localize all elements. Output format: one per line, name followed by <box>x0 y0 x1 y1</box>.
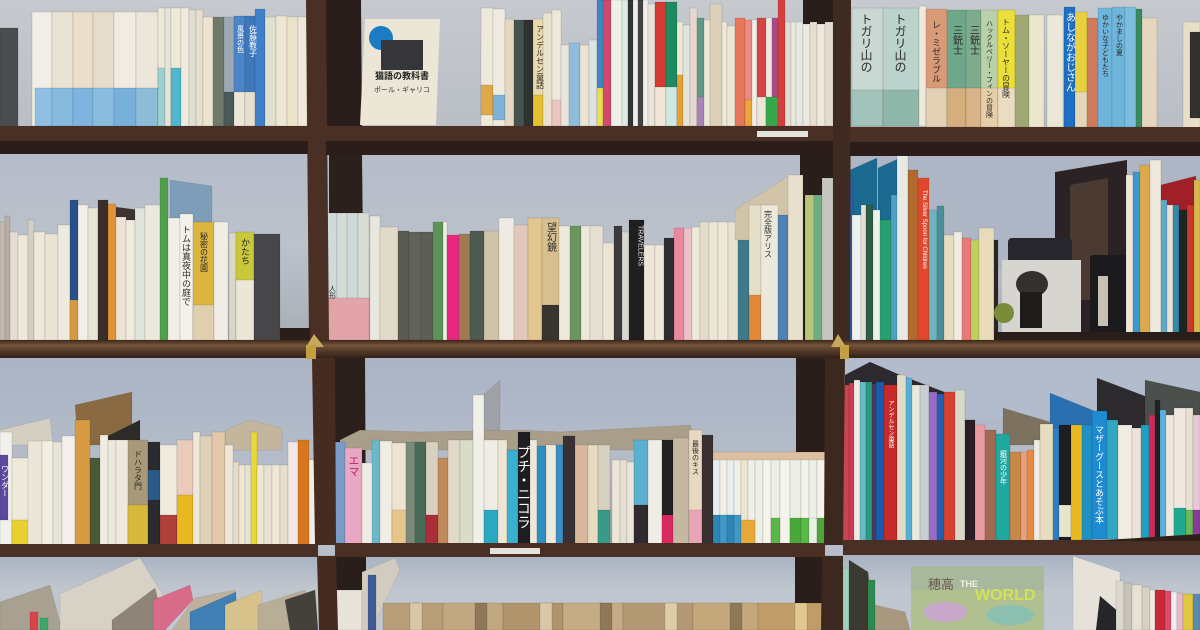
rear uprights behind the books <box>326 0 834 630</box>
spine titles: top row: 三銃士 <box>968 25 980 55</box>
black bookend with books and card <box>994 160 1127 338</box>
spine titles: third row: 銀河の少年 <box>1000 449 1007 486</box>
shelf label plate top <box>757 131 808 137</box>
spine titles: top row: ハックルベリー・フィンの冒険 <box>986 20 993 119</box>
book: cat textbook cover: ポール・ギャリコ <box>374 86 430 94</box>
card with ink figure <box>1002 260 1081 337</box>
spine titles: second row: かたち <box>240 238 250 265</box>
illustrated book: the world: THE <box>960 579 978 589</box>
right upright post <box>821 0 851 630</box>
book: cat textbook cover <box>360 19 440 125</box>
illustrated book: the world <box>911 566 1044 630</box>
spine titles: second row <box>181 190 927 306</box>
spine titles: top row <box>236 12 1123 119</box>
spine titles: second row: 完全版アリス <box>764 210 772 258</box>
left upright post <box>306 0 338 630</box>
spine titles: third row: ドハラタ門 <box>134 450 142 491</box>
spine titles: second row: 望幻鏡 <box>544 222 556 253</box>
books: top row, middle bay <box>481 0 833 126</box>
illustrated book: the world: WORLD <box>975 587 1035 604</box>
shelf board 2 with brass rail <box>0 328 1200 358</box>
spine titles: top row: トム・ソーヤーの冒険 <box>1002 18 1010 99</box>
books: second row, right bay <box>850 155 998 340</box>
spine titles: top row: 佐藤教子 <box>248 24 258 58</box>
spine titles: second row: The Silver Spoon for Children <box>921 190 927 269</box>
spine titles: third row: 最後のキス <box>692 440 699 475</box>
icon: blue round sticker <box>369 26 393 50</box>
shelf board 3 <box>0 534 1200 557</box>
brass clasp left <box>306 334 324 359</box>
spine titles: third row: マザーグースとあそぶ本 <box>1094 425 1104 525</box>
spine titles: third row: エマ <box>347 455 359 477</box>
spine titles: second row: 秘密の花園 <box>200 231 208 273</box>
books: bottom row, right bay <box>843 556 1200 630</box>
spine titles: top row: あしながおじさん <box>1064 12 1076 92</box>
books: top row, left bay <box>0 8 307 126</box>
spine titles: third row <box>0 400 1104 529</box>
shelf board 1 <box>0 126 1200 156</box>
books: bottom row, middle bay <box>336 558 822 630</box>
illustrated book: the world: 穂高 <box>928 577 954 592</box>
boxed green and blue book set <box>713 452 826 545</box>
books: bottom row, left bay <box>0 558 318 630</box>
books: third row, right bay <box>843 362 1200 545</box>
spine titles: third row: プチ・ニコラ <box>516 445 532 529</box>
book: cat textbook cover: 猫語の教科書 <box>375 70 429 81</box>
spine titles: third row: ワンダー <box>0 465 10 497</box>
spine titles: top row: 三銃士 <box>950 25 962 55</box>
books: second row, far right <box>1126 160 1200 340</box>
books: second row, left bay <box>0 178 280 340</box>
shelf label plate bottom <box>490 548 540 554</box>
spine titles: third row: アンデルセン童話 <box>887 400 894 449</box>
books: second row, middle bay <box>327 175 833 340</box>
spine titles: top row: ゆかいな子どもたち <box>1102 14 1109 77</box>
spine titles: top row: 風景の色 <box>236 25 244 53</box>
spine titles: top row: トガリ山の <box>859 13 873 73</box>
books: third row, middle bay <box>334 380 713 545</box>
spine titles: top row: レ・ミゼラブル <box>931 20 941 83</box>
spine titles: top row: アンデルセン童話 <box>536 25 544 90</box>
icon: moss ball <box>994 303 1014 323</box>
spine titles: second row: TRAVELERS <box>636 225 644 266</box>
spine titles: top row: トガリ山の <box>893 13 907 73</box>
brass clasp right <box>831 334 849 359</box>
books: top row, right bay <box>852 6 1200 129</box>
spine titles: top row: やかましの夏 <box>1116 14 1123 56</box>
spine titles: second row: トムは真夜中の庭で <box>181 225 191 306</box>
books: third row, left bay <box>0 392 316 545</box>
spine titles: second row: 人形 <box>328 285 336 300</box>
